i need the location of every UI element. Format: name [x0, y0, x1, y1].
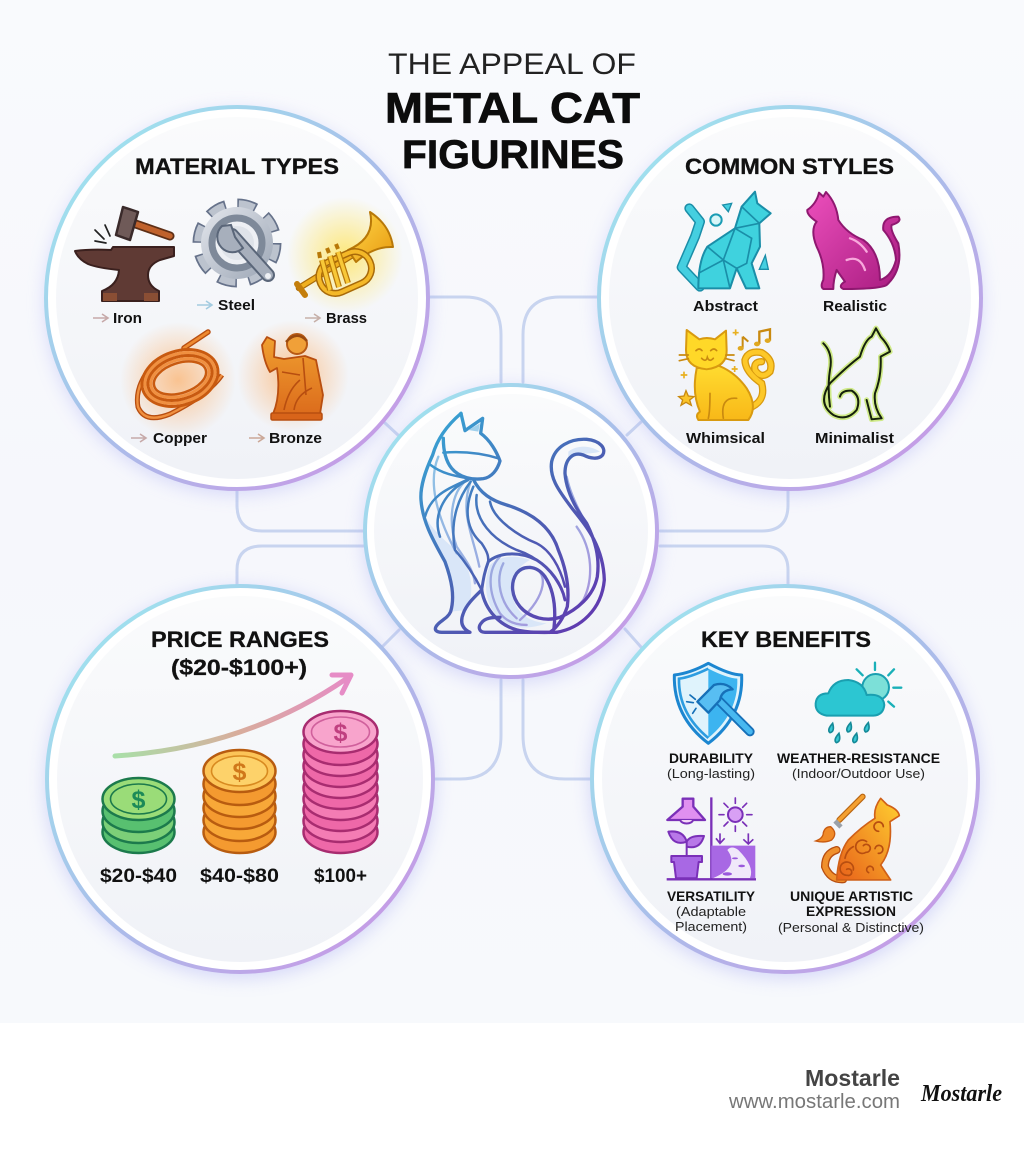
label: iron — [93, 310, 142, 327]
icon: realistic cat — [807, 192, 900, 289]
label: durability: (Long-lasting) — [667, 766, 755, 781]
heading: material types: MATERIAL TYPES — [135, 154, 339, 179]
label: versatility — [667, 889, 755, 934]
footer band — [0, 1023, 1024, 1154]
label: iron: Iron — [113, 310, 142, 327]
label: whimsical: Whimsical — [686, 430, 765, 447]
icon: gear and wrench — [200, 206, 274, 280]
label: bronze — [249, 430, 322, 447]
label: realistic: Realistic — [823, 298, 887, 315]
label: versatility: (Adaptable — [676, 904, 746, 919]
icon: abstract cat — [682, 192, 771, 288]
icon: bronze statue — [237, 320, 349, 432]
panel: central cat — [363, 385, 659, 683]
label: minimalist: Minimalist — [815, 430, 894, 447]
label: unique artistic expression: UNIQUE ARTISTIC — [790, 889, 913, 904]
icon: line-art cat — [421, 413, 604, 632]
label: copper — [131, 430, 207, 447]
label: bronze: Bronze — [269, 430, 322, 447]
icon: minimalist cat — [823, 328, 890, 419]
coin stack: green — [102, 778, 174, 853]
heading: price ranges — [151, 627, 329, 680]
title: METAL CAT — [385, 84, 640, 132]
heading: common styles: COMMON STYLES — [685, 154, 894, 179]
label: unique artistic expression: EXPRESSION — [806, 904, 896, 919]
label: copper: Copper — [153, 430, 207, 447]
icon: whimsical cat — [679, 329, 771, 420]
label: $20-$40: $20-$40 — [100, 866, 177, 887]
icon: anvil and hammer — [75, 207, 174, 301]
footer brand text: www.mostarle.com — [728, 1091, 900, 1113]
title: FIGURINES — [402, 133, 624, 177]
label: versatility: VERSATILITY — [667, 889, 755, 904]
icon: copper coil — [120, 322, 236, 438]
label: brass — [305, 310, 367, 327]
icon: versatility scene — [667, 797, 756, 879]
label: weather-resistance: WEATHER-RESISTANCE — [777, 751, 940, 766]
title: THE APPEAL OF — [388, 48, 636, 81]
label: $40-$80: $40-$80 — [200, 866, 279, 887]
label: weather-resistance: (Indoor/Outdoor Use) — [792, 766, 925, 781]
trend arrow — [115, 675, 351, 756]
label: steel: Steel — [218, 297, 255, 314]
label: unique artistic expression: (Personal & Distinctive) — [778, 920, 924, 935]
coin stack: pink — [304, 711, 378, 853]
label: durability: DURABILITY — [669, 751, 753, 766]
panel: price ranges — [45, 586, 435, 978]
footer brand text: Mostarle — [805, 1065, 900, 1091]
coin stack: orange — [204, 750, 276, 853]
label: steel — [197, 297, 255, 314]
footer logo: Mostarle — [920, 1081, 1002, 1107]
icon: weather cloud — [816, 663, 901, 743]
panel: material types — [45, 107, 429, 494]
footer brand text — [728, 1065, 900, 1113]
label: versatility: Placement) — [675, 919, 747, 934]
label: durability — [667, 751, 755, 781]
label: weather-resistance — [777, 751, 940, 781]
label: unique artistic expression — [778, 889, 924, 935]
label: $100+: $100+ — [314, 866, 367, 887]
connector lines — [237, 297, 788, 779]
coin stack: orange: $ — [233, 758, 247, 786]
label: abstract: Abstract — [693, 298, 758, 315]
heading: key benefits: KEY BENEFITS — [701, 627, 871, 652]
icon: artistic cat and brush — [816, 797, 899, 880]
coin stack: green: $ — [132, 786, 146, 814]
icon: brass trumpet — [287, 197, 403, 313]
title — [385, 48, 640, 177]
coin stack: pink: $ — [334, 719, 348, 747]
label: brass: Brass — [326, 310, 367, 327]
heading: price ranges: ($20-$100+) — [171, 655, 307, 680]
panel: key benefits — [590, 586, 980, 978]
icon: shield and hammer — [674, 663, 750, 743]
panel: common styles — [598, 107, 982, 494]
heading: price ranges: PRICE RANGES — [151, 627, 329, 652]
